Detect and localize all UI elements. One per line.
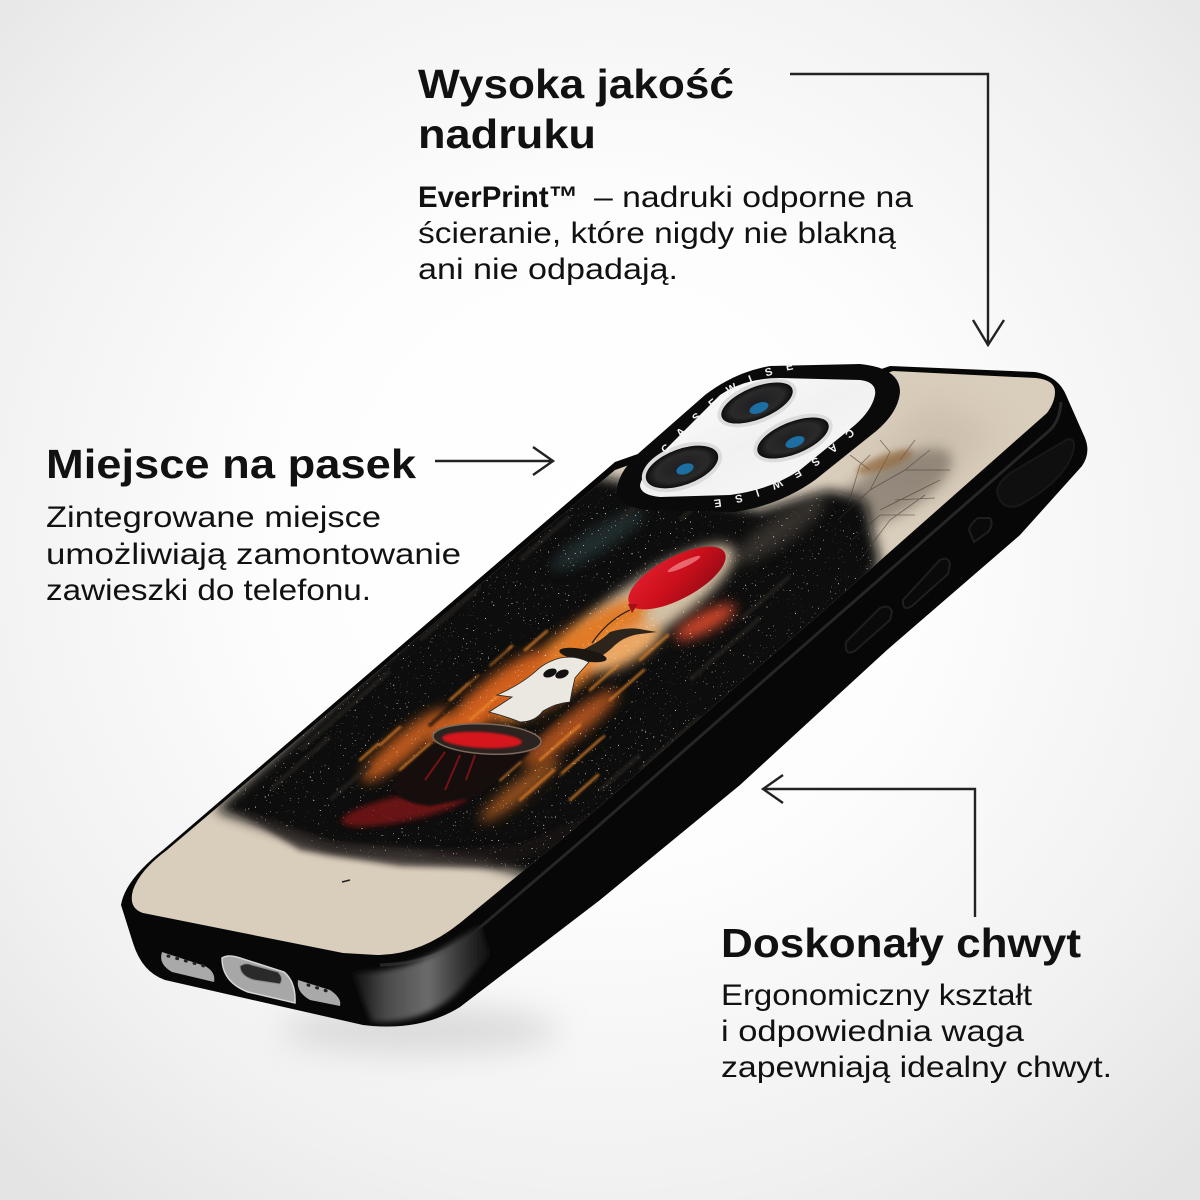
callout: perfect grip: [721, 920, 1112, 1084]
volume button upper: [903, 559, 950, 608]
case rim highlight: [380, 402, 1061, 965]
ring lettering: CASEWISE: [662, 362, 794, 452]
ghost eyes: [543, 668, 569, 678]
dark night sky: [215, 470, 880, 880]
text: strap slot: Zintegrowane miejsce: [46, 501, 381, 534]
right speaker: [298, 980, 340, 1006]
orange fire glow: [355, 581, 740, 828]
glossy bottom corner: [352, 925, 490, 1022]
back face: [132, 371, 1055, 955]
arrow: print quality: [790, 74, 1004, 345]
text: print quality: – nadruki odporne na: [594, 181, 913, 214]
text: strap slot: zawieszki do telefonu.: [46, 574, 371, 607]
pale glow behind balloon: [570, 535, 743, 649]
heading: strap slot: Miejsce na pasek: [46, 441, 416, 487]
bottom smoke edge: [230, 806, 600, 868]
case body: [121, 366, 1087, 1027]
red liquid: [442, 730, 522, 750]
cauldron body: [392, 742, 530, 806]
grey smoke around camera: [734, 493, 828, 567]
artwork: ghost, balloon and cauldron: [161, 364, 980, 1006]
volume button lower: [846, 607, 892, 653]
cauldron rim: [432, 721, 542, 757]
arrow: strap slot: [435, 447, 553, 475]
hat cone: [584, 628, 657, 655]
witch hat: [558, 628, 657, 665]
text: strap slot: umożliwiają zamontowanie: [46, 538, 461, 571]
side action bump: [997, 439, 1074, 507]
text: print quality: ścieranie, które nigdy nie blakną: [418, 217, 896, 250]
paint speckles: [225, 476, 882, 874]
heading: print quality: nadruku: [418, 111, 596, 157]
phone in case: [121, 362, 1088, 1027]
phone drop shadow: [280, 1006, 560, 1054]
camera ring: [617, 364, 900, 512]
rust foliage: [854, 445, 916, 479]
text: perfect grip: zapewniają idealny chwyt.: [721, 1051, 1112, 1084]
beige upper haze: [886, 410, 980, 470]
heading: perfect grip: Doskonały chwyt: [721, 920, 1081, 966]
usb-c port: [222, 956, 295, 1003]
text: print quality: ani nie odpadają.: [418, 253, 678, 286]
side buttons: [846, 439, 1074, 653]
teal mist: [550, 508, 646, 574]
hat brim: [559, 648, 607, 662]
text: print quality: [418, 181, 913, 286]
small switch: [969, 518, 992, 542]
text: perfect grip: [721, 979, 1112, 1084]
ghost: [489, 657, 589, 722]
red drips: [425, 752, 475, 790]
text: perfect grip: i odpowiednia waga: [721, 1015, 1024, 1048]
small bird speck: [342, 880, 350, 882]
arrow: perfect grip: [763, 775, 975, 917]
text: strap slot: [46, 501, 461, 607]
lens lower: [635, 432, 729, 502]
callout: strap slot: [46, 441, 461, 607]
lens right: [747, 404, 839, 472]
left speaker: [161, 952, 214, 982]
red balloon: [628, 546, 726, 613]
ghost sheet: [489, 657, 589, 722]
heading: print quality: [418, 61, 734, 157]
heading: print quality: Wysoka jakość: [418, 61, 734, 107]
dark streaks over fire: [426, 648, 605, 802]
ring lettering lower: CASEWISE: [714, 430, 854, 508]
text: print quality: EverPrint™: [418, 181, 578, 214]
camera glass: [640, 378, 875, 497]
cauldron: [392, 721, 542, 806]
text: perfect grip: Ergonomiczny kształt: [721, 979, 1033, 1012]
tree haze: [838, 442, 958, 532]
orange paint streaks: [360, 621, 668, 800]
callout: print quality: [418, 61, 913, 286]
balloon string: [592, 610, 630, 643]
bare tree branches: [838, 440, 950, 560]
grey paint streaks: [270, 507, 790, 800]
camera bump: [617, 362, 900, 512]
red ground splatter: [339, 794, 470, 830]
bottom ports: [161, 952, 340, 1006]
lens upper: [711, 369, 803, 437]
